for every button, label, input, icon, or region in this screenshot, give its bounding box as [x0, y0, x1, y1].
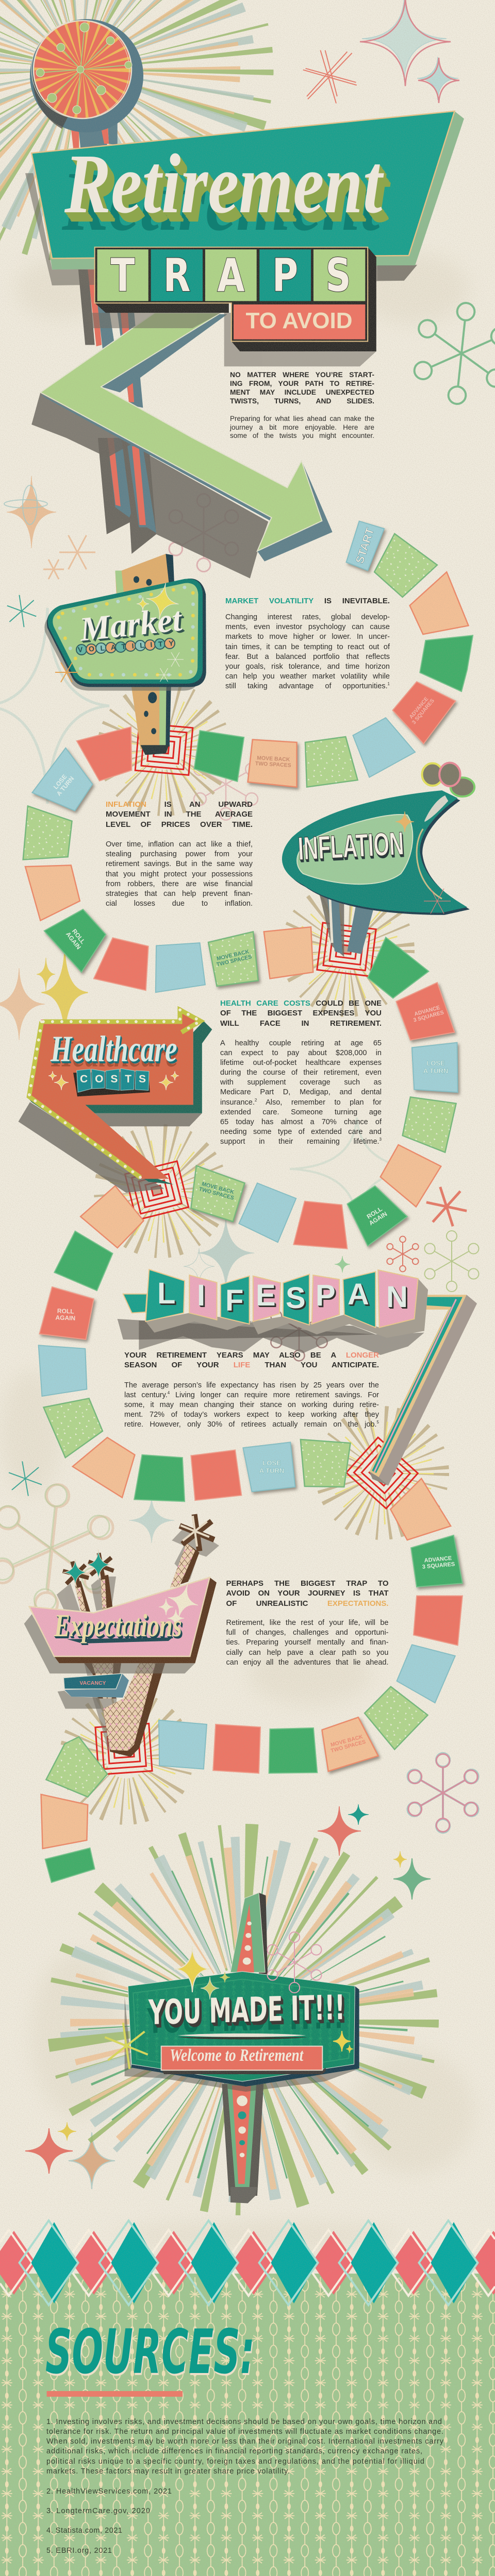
sign shadow — [125, 1996, 357, 2092]
post upper — [115, 554, 174, 603]
intro text: NO MATTER WHERE YOU’RE START- — [230, 371, 374, 379]
intro text: TWISTS, TURNS, AND SLIDES. — [230, 397, 374, 405]
coral rule — [47, 2391, 183, 2397]
board tile: start: START — [353, 526, 377, 565]
market volatility text — [225, 597, 390, 690]
health care text: insurance.2 Also, remember to plan for — [220, 1098, 382, 1107]
panel — [27, 1007, 204, 1179]
drop shadow — [118, 1319, 424, 1355]
tile: advance 3 squares: ADVANCE — [408, 696, 430, 720]
paper stains — [0, 252, 474, 2250]
inflation text: MOVEMENT IN THE AVERAGE — [106, 810, 253, 819]
lifespan sign letters: S — [286, 1281, 306, 1315]
main sign shadow — [25, 173, 417, 285]
tile: move back two spaces 2 — [208, 931, 258, 986]
sources list: markets. These factors may result in greater share price volatility. — [46, 2467, 290, 2476]
tile: move back two spaces 4: MOVE BACK — [330, 1734, 364, 1748]
title: traps letters: R — [163, 249, 190, 302]
title: traps letters — [110, 249, 351, 302]
sign: market volatility — [44, 554, 206, 755]
health care text: support in their remaining lifetime.3 — [220, 1138, 382, 1146]
board bursts — [82, 705, 426, 1802]
lifespan text: The average person’s life expectancy has risen by 25 years over the — [124, 1381, 379, 1389]
intro text: Preparing for what lies ahead can make the — [230, 415, 374, 422]
welcome to retirement: Welcome to Retirement — [170, 2046, 303, 2065]
inflation text: from robbers, there are wise financial — [106, 880, 253, 888]
market volatility text: fear. But a balanced portfolio that reflects — [225, 653, 390, 661]
lifespan sign letters — [157, 1277, 408, 1317]
sources list: 4. Statista.com, 2021 — [46, 2527, 122, 2535]
pole shadows — [57, 1525, 219, 1752]
lifespan text — [124, 1351, 379, 1429]
sign stars — [97, 1932, 353, 2073]
expectations text — [226, 1579, 389, 1667]
panels — [145, 1269, 418, 1328]
tile: lose a turn: LOSE — [52, 773, 69, 791]
sun disc — [30, 19, 143, 132]
tile: move back two spaces 2: TWO SPACES — [216, 954, 252, 968]
tile: roll again 3 — [40, 1287, 94, 1340]
yellow stars — [55, 580, 184, 682]
health care text: extended care. Someone turning age — [220, 1108, 382, 1116]
health care text: 65 today has almost a 70% chance of — [220, 1118, 382, 1126]
board tiles: second stretch — [54, 927, 456, 1291]
traps shadow — [88, 265, 417, 366]
market sign lettering: Market — [78, 601, 184, 649]
lifespan text: SEASON OF YOUR LIFE THAN YOU ANTICIPATE. — [124, 1361, 379, 1369]
tile: advance 3 squares 3 — [411, 1535, 463, 1587]
health care text: A healthy couple retiring at age 65 — [220, 1039, 382, 1047]
tile: advance 3 squares 2: 3 SQUARES — [412, 1009, 444, 1023]
fin top — [230, 1893, 268, 1975]
main sign side — [51, 111, 464, 269]
health care text — [220, 999, 382, 1146]
lifespan text: some, it may mean changing their stance on working during retire- — [124, 1401, 379, 1409]
inflation text: LEVEL OF PRICES OVER TIME. — [106, 820, 253, 829]
swoosh — [67, 1637, 173, 1643]
lifespan sign letters: P — [316, 1279, 336, 1312]
sources list: political risks unique to a specific country, foreign taxes and regulations, and the potential for illiquid — [46, 2458, 424, 2466]
market volatility text: markets to move higher or lower. In uncer- — [225, 633, 390, 641]
diamond border — [0, 2221, 495, 2305]
sources list: tolerance for risk. The return and principal value of investments will fluctuate as market conditions change. — [46, 2428, 443, 2436]
tile: lose a turn 2 — [412, 1043, 458, 1092]
sign: expectations — [24, 1511, 220, 1757]
board tiles: third stretch — [39, 1345, 463, 1883]
title: traps letters: T — [111, 249, 135, 302]
sign: lifespan — [118, 1269, 477, 1485]
health care text: during the course of their retirement, even — [220, 1069, 382, 1077]
health care text: HEALTH CARE COSTS COULD BE ONE — [220, 999, 382, 1008]
market volatility text: ments, even investor psychology can cause — [225, 623, 390, 631]
tile: advance 3 squares 3: 3 SQUARES — [422, 1561, 455, 1570]
tile: move back two spaces: MOVE BACK — [257, 755, 290, 763]
tile: advance 3 squares 2: ADVANCE — [414, 1005, 441, 1018]
market volatility text: your goals, risk tolerance, and time horizon — [225, 663, 390, 671]
title: traps letters: S — [325, 249, 351, 302]
tile: lose a turn 3: A TURN — [259, 1467, 284, 1475]
inflation sign lettering: INFLATION — [297, 825, 405, 867]
board — [44, 579, 206, 691]
healthcare sign lettering: Healthcare — [51, 1028, 177, 1070]
burst: you made it rays — [119, 1896, 367, 2143]
lifespan text: YOUR RETIREMENT YEARS MAY ALSO BE A LONGER — [124, 1351, 379, 1360]
tile: roll again: ROLL — [71, 928, 87, 945]
tile: lose a turn — [32, 748, 92, 811]
market volatility text: still taking advantage of opportunities.1 — [225, 682, 390, 690]
expectations text: AVOID ON YOUR JOURNEY IS THAT — [226, 1589, 389, 1598]
sign side — [54, 1578, 217, 1663]
tile: roll again 3: AGAIN — [55, 1314, 75, 1322]
costs blocks: COSTS — [80, 1073, 146, 1085]
expectations text: OF UNREALISTIC EXPECTATIONS. — [226, 1599, 389, 1608]
lower pole — [84, 1663, 165, 1757]
board tile: start — [346, 521, 384, 570]
inflation text: that you might protect your possessions — [106, 870, 253, 878]
extrusion — [145, 1279, 428, 1338]
post lower — [131, 684, 171, 755]
lifespan text: last century.4 Living longer can require more retirement savings. For — [124, 1391, 379, 1399]
pole foot — [230, 2187, 257, 2203]
tile: move back two spaces 3 — [191, 1166, 244, 1222]
sources list: 2. HealthViewServices.com, 2021 — [46, 2487, 172, 2496]
star and atom on inflation sign — [395, 811, 451, 913]
tile: lose a turn 3 — [243, 1442, 295, 1492]
pole stars — [60, 1511, 220, 1589]
decor: mid stars and atoms — [0, 476, 478, 1621]
title: traps letters: P — [272, 249, 298, 302]
traps block — [95, 247, 376, 351]
tile: move back two spaces 2: MOVE BACK — [216, 948, 250, 962]
tile: move back two spaces 3: MOVE BACK — [201, 1181, 235, 1195]
bulb border — [29, 1010, 201, 1177]
tail left — [123, 1294, 147, 1313]
tile: roll again 2: ROLL — [366, 1205, 384, 1221]
inflation text: strategies that can help prevent finan- — [106, 890, 253, 898]
market volatility text: can help you weather market volatility while — [225, 672, 390, 681]
tile: roll again: AGAIN — [64, 930, 82, 951]
tile: move back two spaces 3: TWO SPACES — [198, 1186, 235, 1201]
tile: lose a turn 2: A TURN — [423, 1067, 448, 1075]
pattern — [0, 2277, 495, 2576]
burst: top rays — [0, 0, 200, 189]
tile: lose a turn 2: LOSE — [426, 1059, 445, 1067]
inflation text — [106, 800, 253, 908]
health care text: lifetime out-of-pocket healthcare expenses — [220, 1059, 382, 1067]
fin bottom — [222, 2084, 263, 2196]
green background — [0, 2274, 495, 2576]
tile: advance 3 squares 2 — [396, 982, 455, 1040]
posts below sign — [78, 269, 143, 408]
expectations text: ties. Preparing yourself mentally and finan- — [226, 1638, 389, 1647]
inflation text: INFLATION IS AN UPWARD — [106, 800, 253, 809]
intro text — [230, 371, 374, 439]
side — [85, 1021, 212, 1113]
expectations text: PERHAPS THE BIGGEST TRAP TO — [226, 1579, 389, 1588]
posts — [317, 884, 376, 957]
tile: roll again 2: AGAIN — [368, 1210, 388, 1227]
lifespan sign letters: L — [157, 1277, 175, 1310]
intro text: some of the twists you might encounter. — [230, 432, 374, 439]
expectations text: can enjoy all the adventures that lie ahead. — [226, 1658, 389, 1667]
tile: move back two spaces — [248, 739, 296, 787]
swoosh bar — [177, 2033, 308, 2039]
you made it lettering: YOU MADE IT!!! — [148, 1988, 345, 2032]
tile: move back two spaces 4: TWO SPACES — [330, 1739, 367, 1754]
health care text: needing some type of extended care and — [220, 1128, 382, 1136]
lifespan text: ment. 72% of today’s workers expect to keep working after they — [124, 1411, 379, 1419]
sources list — [46, 2418, 444, 2555]
title: to avoid: TO AVOID — [245, 308, 352, 333]
sign: retirement traps to avoid — [25, 19, 464, 579]
decor: lower stars — [25, 1753, 478, 2189]
welcome plate — [161, 2046, 326, 2074]
lifespan sign letters: A — [348, 1278, 369, 1311]
lifespan sign letters: E — [256, 1279, 276, 1312]
lifespan text: retire. However, only 30% of retirees actually remain on the job.5 — [124, 1420, 379, 1429]
cream stars — [159, 1580, 203, 1627]
inflation text: retirement savings. But in the same way — [106, 860, 253, 868]
inflation text: cial losses due to inflation. — [106, 900, 253, 908]
expectations sign lettering: Expectations — [54, 1608, 182, 1643]
health care text: WILL FACE IN RETIREMENT. — [220, 1019, 382, 1028]
vacancy panel: VACANCY — [79, 1680, 106, 1686]
expectations text: full of changes, challenges and opportuni- — [226, 1629, 389, 1637]
health stars — [48, 1071, 179, 1090]
board tiles: first stretch — [23, 534, 473, 921]
volatility balls: VOLATILITY — [77, 639, 174, 654]
expectations text: cially can help pave a clear path so you — [226, 1649, 389, 1657]
tile: roll again — [44, 909, 106, 972]
tile: lose a turn 3: LOSE — [262, 1459, 281, 1467]
sources list: 5. EBRI.org, 2021 — [46, 2547, 112, 2555]
sources heading: SOURCES: — [45, 2317, 255, 2388]
sign: you made it — [97, 1893, 359, 2203]
lifespan sign letters: F — [225, 1284, 243, 1317]
tile: move back two spaces: TWO SPACES — [255, 760, 291, 769]
arrow shadow and lower posts — [98, 438, 268, 579]
expectations text: Retirement, like the rest of your life, will be — [226, 1619, 389, 1627]
health care text: can expect to pay about $208,000 in — [220, 1049, 382, 1057]
sign panel — [29, 1578, 210, 1656]
lifespan sign letters: I — [197, 1279, 205, 1312]
seven post — [369, 1295, 477, 1485]
sources list: 1. Investing involves risks, and investment decisions should be based on your own goals, time horizon and — [46, 2418, 442, 2426]
green arrow — [31, 313, 333, 562]
inflation text: Over time, inflation can act like a thief, — [106, 840, 253, 849]
health care text: with supplement coverage such as — [220, 1078, 382, 1087]
intro text: MENT MAY INCLUDE UNEXPECTED — [230, 388, 374, 396]
lifespan sign letters: N — [386, 1280, 408, 1314]
tile: move back two spaces 4 — [322, 1717, 378, 1771]
title: retirement: Retirement — [64, 137, 382, 231]
tile: roll again 2 — [347, 1186, 407, 1246]
sources list: additional risks, which include differences in financial reporting standards, currency exchange rates, — [46, 2447, 422, 2455]
sign shadow — [24, 1614, 195, 1673]
sources list: 3. LongtermCare.gov, 2020 — [46, 2507, 150, 2515]
post above sign — [70, 117, 118, 148]
tile: roll again 3: ROLL — [57, 1307, 74, 1315]
sign: healthcare costs — [19, 1007, 212, 1193]
costs blocks — [73, 1069, 150, 1096]
health care text: Medicare Part D, Medigap, and dental — [220, 1088, 382, 1096]
title: traps letters: A — [217, 249, 245, 302]
intro text: ING FROM, YOUR PATH TO RETIRE- — [230, 380, 374, 387]
decor: top stars and atom — [303, 0, 495, 409]
balloons — [422, 762, 474, 822]
board targets — [95, 723, 418, 1775]
market volatility text: Changing interest rates, global develop- — [225, 613, 390, 621]
tile: advance 3 squares — [393, 682, 455, 744]
sources panel — [0, 2274, 495, 2576]
main sign panel — [31, 111, 455, 258]
shadows — [19, 1102, 202, 1193]
sign: inflation — [282, 762, 474, 957]
inflation text: stealing purchasing power from your — [106, 850, 253, 858]
vacancy panel — [58, 1673, 129, 1709]
intro text: journey a bit more enjoyable. Here are — [230, 423, 374, 431]
health care text: OF THE BIGGEST EXPENSES YOU — [220, 1009, 382, 1018]
panel pattern — [133, 1979, 350, 2075]
sign side — [131, 1986, 359, 2087]
tile: advance 3 squares: 3 SQUARES — [411, 698, 436, 725]
sources list: When sold, investments may be worth more or less than their original cost. International investments carry — [46, 2437, 444, 2446]
green panel — [128, 1972, 355, 2081]
upper poles — [75, 1543, 200, 1612]
tile: advance 3 squares 3: ADVANCE — [424, 1555, 452, 1564]
boomerang — [282, 790, 470, 915]
tile: lose a turn: A TURN — [55, 775, 75, 798]
market volatility text: tain times, it can be tempting to react out of — [225, 643, 390, 651]
market volatility text: MARKET VOLATILITY IS INEVITABLE. — [225, 597, 390, 605]
